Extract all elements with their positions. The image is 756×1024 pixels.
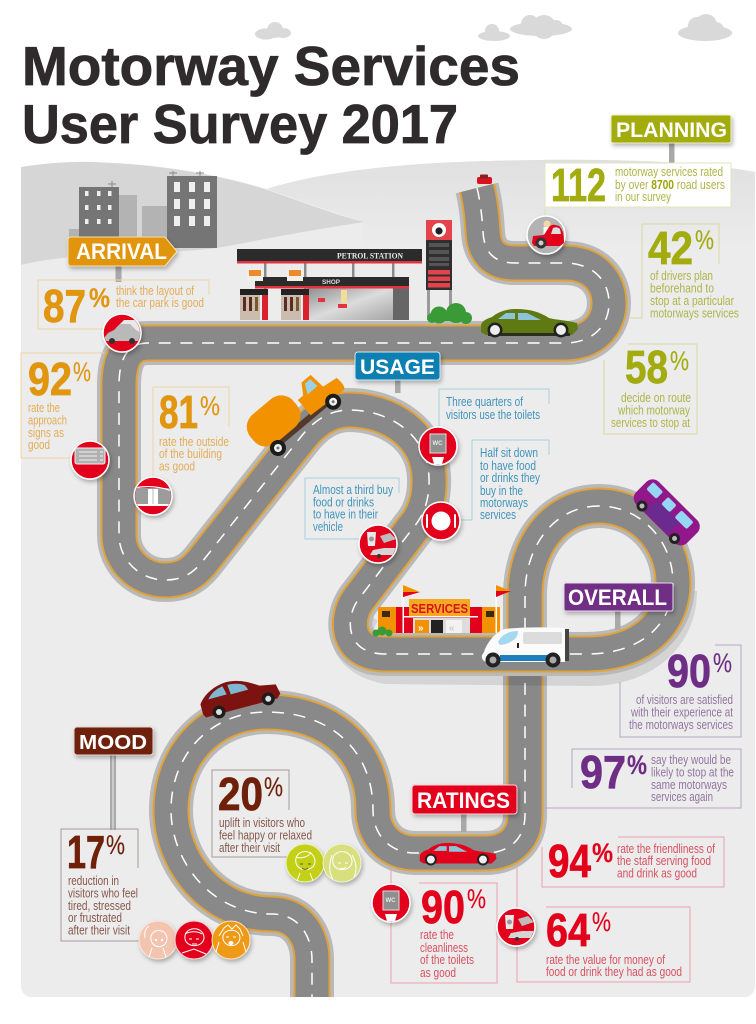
callout: 64%: rate the value for money of: [546, 953, 665, 967]
callout: 58%: %: [670, 346, 689, 376]
sign: usage: USAGE: [360, 356, 435, 379]
callout: 97%: likely to stop at the: [651, 766, 734, 780]
callout: 42%: of drivers plan: [650, 269, 713, 283]
callout: 64%: 64: [546, 904, 590, 956]
callout: 20%: feel happy or relaxed: [219, 828, 312, 842]
price totem sign: [426, 220, 452, 320]
callout: 92%: %: [73, 357, 91, 387]
callout: 112: motorway services rated: [615, 165, 723, 179]
callout: 20%: %: [264, 772, 283, 802]
icon: happy face: [286, 844, 324, 882]
icon: value for money: [497, 908, 535, 946]
callout: 90% cleanliness: %: [467, 884, 486, 914]
callout: 92%: rate the: [28, 401, 60, 415]
icon: tired face: [139, 921, 177, 959]
icon: building outside: [134, 477, 172, 515]
overpass shadow: [352, 591, 675, 664]
callout: 81%: rate the outside: [159, 435, 229, 449]
callout: 112: 112: [551, 159, 606, 211]
white van: [482, 627, 569, 668]
callout: 42%: 42: [648, 222, 693, 274]
green car: [481, 309, 578, 338]
callout: 17%: [61, 826, 140, 941]
services building: [372, 585, 511, 636]
petrol station: SHOP: [322, 279, 341, 286]
icon: car park: [103, 314, 142, 352]
callout: 94%: the staff serving food: [617, 854, 711, 868]
callout: half sit down: to have food: [480, 459, 536, 473]
bushes: [427, 303, 472, 324]
buildings: [69, 171, 217, 248]
petrol station: [237, 249, 422, 320]
icon: relaxed face: [323, 844, 361, 882]
callout: 94%: and drink as good: [617, 866, 697, 880]
callout: 90% cleanliness: rate the: [420, 928, 454, 942]
callout: 58%: [604, 341, 697, 434]
callout: 20%: 20: [218, 768, 263, 820]
callout: 90% satisfied: of visitors are satisfied: [636, 693, 733, 707]
background panel: [21, 160, 755, 997]
maroon car: [197, 669, 283, 722]
dark hill: [21, 162, 364, 265]
callout: 94%: rate the friendliness of: [617, 842, 715, 856]
callout: 97%: 97: [580, 746, 626, 798]
callout: 87%: %: [89, 283, 110, 313]
callout: 42%: beforehand to: [650, 282, 714, 296]
sign: planning: [611, 115, 731, 164]
callout: almost a third: [305, 478, 399, 539]
callout: 92%: good: [28, 438, 50, 452]
callout: half sit down: motorways: [480, 496, 528, 510]
sign: mood: MOOD: [79, 732, 147, 754]
callout: three quarters use toilets: visitors use the toilets: [446, 408, 540, 422]
callout: 94%: [542, 835, 724, 887]
callout: 90% satisfied: 90: [667, 645, 711, 697]
red car: [420, 843, 496, 866]
callout: 94%: 94: [548, 835, 591, 887]
callout: 87%: [38, 280, 209, 332]
sign: arrival: [68, 237, 177, 282]
callout: 90% satisfied: %: [713, 648, 732, 678]
callout: 17%: %: [106, 830, 125, 860]
callout: 90% satisfied: [620, 645, 741, 737]
lower road section: [171, 506, 599, 997]
callout: 81%: of the building: [159, 447, 222, 461]
icon: toilets: WC: [432, 441, 443, 447]
callout: almost a third: to have in their: [313, 508, 378, 522]
callout: 58%: services to stop at: [611, 416, 690, 430]
callout: 81%: %: [200, 391, 220, 421]
icon: frustrated face: [212, 921, 250, 959]
services building: »: [418, 623, 424, 634]
upper road section: [119, 188, 673, 654]
callout: three quarters use toilets: [439, 389, 549, 427]
callout: 64%: %: [592, 907, 611, 937]
callout: 90% satisfied: with their experience at: [630, 706, 733, 720]
icon: stressed face: [175, 921, 213, 959]
callout: 90% cleanliness: [391, 870, 497, 983]
callout: 94%: %: [592, 838, 613, 868]
icon: driver in red car: [527, 216, 565, 254]
callout: half sit down: buy in the: [480, 484, 523, 498]
sign: planning: PLANNING: [616, 119, 727, 142]
light hill: [267, 160, 755, 250]
callout: 87%: 87: [43, 280, 86, 332]
sign: ratings: [412, 785, 517, 832]
callout: 58%: 58: [625, 341, 668, 393]
callout: 90% cleanliness: 90: [421, 881, 465, 933]
sign: ratings: RATINGS: [417, 788, 510, 813]
callout: 17%: 17: [67, 826, 105, 878]
callout: 64%: [517, 868, 690, 982]
callout: 97%: same motorways: [651, 778, 727, 792]
callout: 97%: %: [627, 750, 647, 780]
callout: 92%: signs as: [28, 426, 64, 440]
callout: half sit down: [460, 440, 549, 522]
callout: 90% cleanliness: of the toilets: [420, 953, 474, 967]
title: Motorway Services: [22, 35, 520, 97]
callout: 20%: uplift in visitors who: [219, 816, 305, 830]
callout: 17%: reduction in: [68, 874, 119, 888]
icon: toilets rating: WC: [386, 898, 396, 904]
icon: plate and cutlery: [422, 502, 460, 540]
callout: 112: by over 8700 road users: [615, 178, 725, 192]
callout: almost a third: food or drinks: [313, 496, 374, 510]
callout: 92%: 92: [28, 353, 72, 405]
sign: mood: [74, 727, 153, 830]
callout: 42%: %: [695, 225, 714, 255]
callout: 90% satisfied: the motorways services: [629, 718, 733, 732]
sign: arrival: ARRIVAL: [76, 239, 167, 264]
callout: 42%: stop at a particular: [650, 294, 734, 308]
callout: 20%: [212, 768, 312, 857]
callout: 92%: approach: [28, 414, 67, 428]
callout: almost a third: vehicle: [313, 520, 343, 534]
purple van: [628, 476, 704, 551]
callout: half sit down: Half sit down: [480, 446, 538, 460]
callout: 97%: services again: [651, 790, 713, 804]
sign: usage: [355, 352, 440, 393]
callout: 90% cleanliness: cleanliness: [420, 941, 468, 955]
services building: SERVICES: [411, 602, 468, 616]
callout: 64%: food or drink they had as good: [546, 965, 682, 979]
callout: 20%: after their visit: [219, 841, 280, 855]
icon: food to vehicle: [359, 525, 397, 563]
callout: 87%: think the layout of: [116, 284, 194, 298]
callout: 81%: 81: [159, 386, 198, 438]
callout: 17%: or frustrated: [68, 911, 122, 925]
callout: half sit down: services: [480, 508, 516, 522]
callout: half sit down: or drinks they: [480, 471, 541, 485]
callout: 17%: tired, stressed: [68, 899, 131, 913]
tanker lorry: [240, 358, 353, 463]
callout: 17%: visitors who feel: [68, 886, 138, 900]
icon: toilets rating: [372, 884, 410, 922]
callout: three quarters use toilets: Three quarters of: [446, 395, 523, 409]
callout: almost a third: Almost a third buy: [313, 483, 394, 497]
title: User Survey 2017: [22, 93, 458, 155]
services building: «: [449, 623, 455, 634]
icon: toilets: [419, 427, 457, 465]
icon: approach sign: [71, 441, 109, 479]
callout: 58%: which motorway: [617, 404, 691, 418]
clouds: [255, 14, 732, 41]
sign: overall: [564, 583, 673, 630]
callout: 42%: [630, 222, 739, 320]
callout: 97%: [545, 746, 741, 808]
sign: overall: OVERALL: [568, 585, 667, 610]
callout: 112: in our survey: [615, 190, 672, 204]
title: [22, 35, 520, 155]
callout: 90% cleanliness: as good: [420, 966, 456, 980]
petrol station: PETROL STATION: [337, 250, 404, 260]
small red car at start of road: [477, 174, 492, 184]
callout: 81%: [153, 386, 229, 478]
callout: 97%: say they would be: [651, 753, 731, 767]
callout: 58%: decide on route: [621, 391, 691, 405]
callout: 81%: as good: [159, 460, 195, 474]
callout: 92%: [21, 353, 104, 458]
callout: 87%: the car park is good: [116, 296, 204, 310]
callout: 17%: after their visit: [68, 924, 130, 938]
callout: 112: [545, 159, 731, 218]
